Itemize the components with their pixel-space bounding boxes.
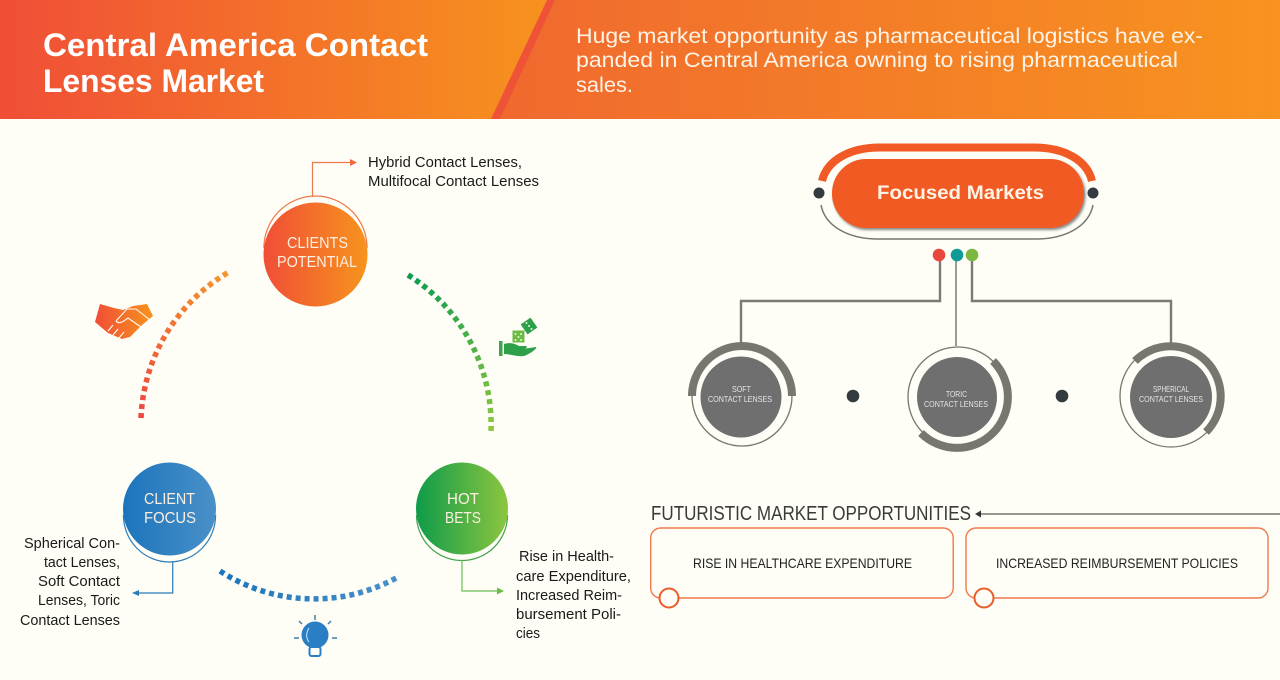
arrow: client focus to label bbox=[132, 562, 173, 596]
text: hot bets segments: bursement Poli- bbox=[516, 606, 621, 623]
card: increased reimbursement policies: INCREASED REIMBURSEMENT POLICIES bbox=[996, 555, 1238, 571]
text: client focus segments bbox=[20, 535, 121, 629]
node: clients potential bbox=[264, 196, 368, 306]
market circle: soft contact lenses bbox=[692, 346, 792, 446]
node: clients potential: POTENTIAL bbox=[277, 254, 357, 271]
focused markets outer frame bbox=[814, 148, 1098, 239]
text: client focus segments: Contact Lenses bbox=[20, 612, 120, 629]
title bbox=[43, 27, 428, 99]
text: clients potential segments bbox=[368, 154, 539, 190]
header description bbox=[576, 25, 1203, 97]
title: Lenses Market bbox=[43, 63, 264, 99]
market circle: spherical contact lenses: SPHERICAL bbox=[1153, 384, 1189, 394]
text: hot bets segments: Rise in Health- bbox=[519, 548, 614, 565]
focused markets pill bbox=[832, 159, 1084, 228]
market circle: soft contact lenses: CONTACT LENSES bbox=[708, 394, 772, 404]
text: clients potential segments: Multifocal Contact Lenses bbox=[368, 173, 539, 190]
node: client focus bbox=[123, 462, 216, 562]
text: clients potential segments: Hybrid Contact Lenses, bbox=[368, 154, 522, 171]
header description: sales. bbox=[576, 74, 633, 97]
market circle: toric contact lenses: CONTACT LENSES bbox=[924, 399, 988, 409]
card: increased reimbursement policies bbox=[966, 528, 1268, 608]
dashed arc: clients potential to hot bets bbox=[408, 275, 491, 432]
arrow: hot bets to label bbox=[462, 560, 504, 594]
market circle: soft contact lenses: SOFT bbox=[732, 384, 751, 394]
text: client focus segments: tact Lenses, bbox=[44, 554, 120, 571]
node: client focus: CLIENT bbox=[144, 491, 195, 508]
text: hot bets segments: care Expenditure, bbox=[516, 568, 631, 585]
focused markets pill: Focused Markets bbox=[877, 183, 1044, 204]
header banner bbox=[0, 0, 1280, 119]
arrow: clients potential to label bbox=[312, 159, 357, 197]
node: clients potential: CLIENTS bbox=[287, 235, 348, 252]
node: hot bets bbox=[416, 462, 508, 560]
header description: panded in Central America owning to rising pharmaceutical bbox=[576, 49, 1178, 72]
text: client focus segments: Spherical Con- bbox=[24, 535, 120, 552]
icon: hand with dice bbox=[499, 318, 537, 356]
card: rise in healthcare expenditure bbox=[651, 528, 953, 608]
heading: futuristic market opportunities: FUTURISTIC MARKET OPPORTUNITIES bbox=[651, 503, 971, 525]
card: rise in healthcare expenditure: RISE IN HEALTHCARE EXPENDITURE bbox=[693, 555, 912, 571]
separator dot bbox=[1056, 390, 1068, 402]
text: client focus segments: Soft Contact bbox=[38, 573, 121, 590]
arrow: pointing to opportunities heading bbox=[975, 510, 1280, 518]
title: Central America Contact bbox=[43, 27, 428, 63]
separator dot bbox=[847, 390, 859, 402]
text: hot bets segments: Increased Reim- bbox=[516, 587, 622, 604]
node: hot bets: BETS bbox=[445, 510, 481, 527]
market circle: toric contact lenses bbox=[908, 347, 1008, 448]
node: hot bets: HOT bbox=[447, 491, 479, 508]
icon: light bulb bbox=[294, 615, 337, 656]
connector dots bbox=[933, 249, 978, 261]
icon: handshake bbox=[95, 304, 153, 339]
text: client focus segments: Lenses, Toric bbox=[38, 592, 120, 609]
connector lines bbox=[741, 260, 1171, 346]
text: hot bets segments: cies bbox=[516, 625, 540, 642]
market circle: toric contact lenses: TORIC bbox=[946, 389, 967, 399]
market circle: spherical contact lenses bbox=[1120, 345, 1222, 447]
text: hot bets segments bbox=[516, 548, 631, 642]
market circle: spherical contact lenses: CONTACT LENSES bbox=[1139, 394, 1203, 404]
header description: Huge market opportunity as pharmaceutical logistics have ex- bbox=[576, 25, 1203, 48]
node: client focus: FOCUS bbox=[144, 510, 196, 527]
dashed arc: clients potential to client focus bbox=[141, 272, 229, 418]
dashed arc: client focus to hot bets bbox=[220, 571, 398, 599]
